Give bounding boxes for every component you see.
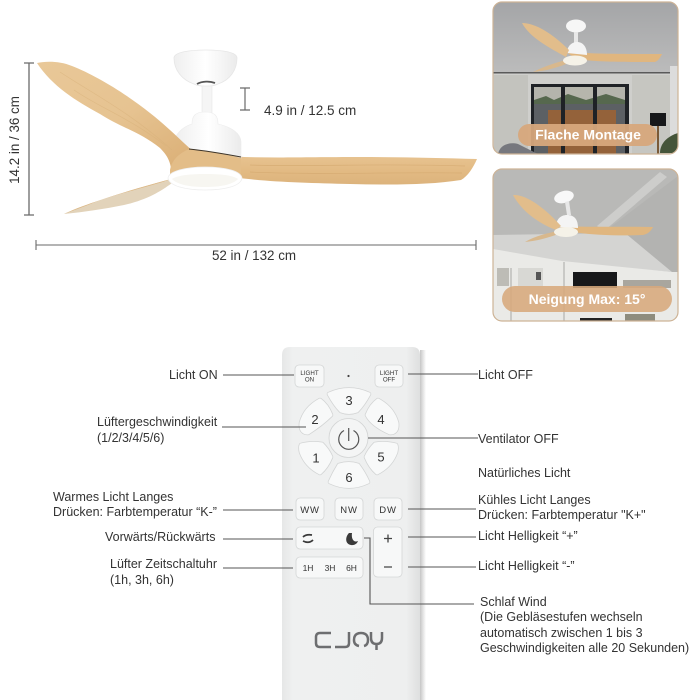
dimension: blade span xyxy=(36,240,476,263)
hub wood band xyxy=(170,149,241,178)
dimension: total height xyxy=(7,63,34,215)
button: light off xyxy=(375,365,403,387)
dimension: rod height xyxy=(240,88,356,118)
speed button 2: 2 xyxy=(311,412,319,427)
remote control xyxy=(282,347,426,700)
label pill xyxy=(502,286,672,312)
label: fan speed: (1/2/3/4/5/6) xyxy=(97,431,164,445)
fan product illustration xyxy=(37,50,477,214)
label: brightness up: Licht Helligkeit “+” xyxy=(478,529,578,543)
button: NW: NW xyxy=(340,505,358,516)
button: reverse and sleep xyxy=(296,527,363,549)
label pill: Flache Montage xyxy=(535,126,641,142)
speed button 4: 4 xyxy=(377,412,385,427)
label: fan timer: Lüfter Zeitschaltuhr xyxy=(110,557,217,571)
button: light on xyxy=(295,365,324,387)
blade: right xyxy=(200,152,477,185)
button: brightness xyxy=(374,527,402,577)
label: natural light: Natürliches Licht xyxy=(478,466,571,480)
mini fan xyxy=(513,189,653,242)
label: cool light: Drücken: Farbtemperatur "K+" xyxy=(478,508,646,522)
label: fan off: Ventilator OFF xyxy=(478,432,559,446)
blade: upper left xyxy=(37,62,203,172)
button: NW xyxy=(335,498,363,520)
dimension: blade span: 52 in / 132 cm xyxy=(212,248,296,263)
label: cool light: Kühles Licht Langes xyxy=(478,493,591,507)
button: DW xyxy=(374,498,402,520)
ceiling canopy xyxy=(174,50,237,86)
speed button 1: 1 xyxy=(312,450,320,466)
button: timer xyxy=(296,557,363,578)
speed button 3: 3 xyxy=(345,393,353,408)
button: WW: WW xyxy=(300,505,320,516)
label pill: Neigung Max: 15° xyxy=(529,291,645,307)
label pill xyxy=(518,124,657,146)
dimension: rod height: 4.9 in / 12.5 cm xyxy=(264,103,356,118)
photo panel: flush mount xyxy=(493,2,678,154)
photo panel: sloped ceiling xyxy=(493,169,678,321)
label: forward reverse: Vorwärts/Rückwärts xyxy=(105,530,215,544)
label: warm light: Drücken: Farbtemperatur “K-” xyxy=(53,505,217,519)
button: light on: LIGHT xyxy=(300,370,319,377)
button: light off: LIGHT xyxy=(380,370,398,377)
button: timer: 6H xyxy=(346,563,357,573)
motor housing xyxy=(176,112,241,158)
speed button 6: 6 xyxy=(345,470,353,485)
blade: lower left xyxy=(64,179,172,214)
label: sleep wind: Geschwindigkeiten alle 20 Sekunden) xyxy=(480,641,689,655)
icon: moon xyxy=(346,533,358,545)
label: fan timer: (1h, 3h, 6h) xyxy=(110,573,174,587)
button: timer: 3H xyxy=(325,563,335,573)
button: light on: ON xyxy=(305,376,314,384)
label: warm light: Warmes Licht Langes xyxy=(53,490,173,504)
label: sleep wind: Schlaf Wind xyxy=(480,595,547,609)
logo xyxy=(316,632,382,650)
leader lines xyxy=(222,374,478,604)
indicator dot xyxy=(347,375,350,377)
button: DW: DW xyxy=(379,505,397,516)
label: fan speed: Lüftergeschwindigkeit xyxy=(97,415,217,429)
button: WW xyxy=(296,498,324,520)
label: light off: Licht OFF xyxy=(478,368,533,382)
power button xyxy=(329,418,368,458)
label: light on: Licht ON xyxy=(169,368,218,382)
down rod xyxy=(202,86,212,113)
speed button 5: 5 xyxy=(377,450,385,464)
button: light off: OFF xyxy=(383,376,395,384)
dimension: total height: 14.2 in / 36 cm xyxy=(7,96,22,184)
speed buttons xyxy=(300,390,397,486)
label: sleep wind: (Die Gebläsestufen wechseln xyxy=(480,610,643,624)
icon: reverse arrows xyxy=(303,535,313,542)
label: brightness down: Licht Helligkeit “-” xyxy=(478,559,575,573)
mini fan xyxy=(522,20,662,72)
label: sleep wind: automatisch zwischen 1 bis 3 xyxy=(480,626,643,640)
button: timer: 1H xyxy=(303,563,313,573)
LED light xyxy=(168,167,242,190)
